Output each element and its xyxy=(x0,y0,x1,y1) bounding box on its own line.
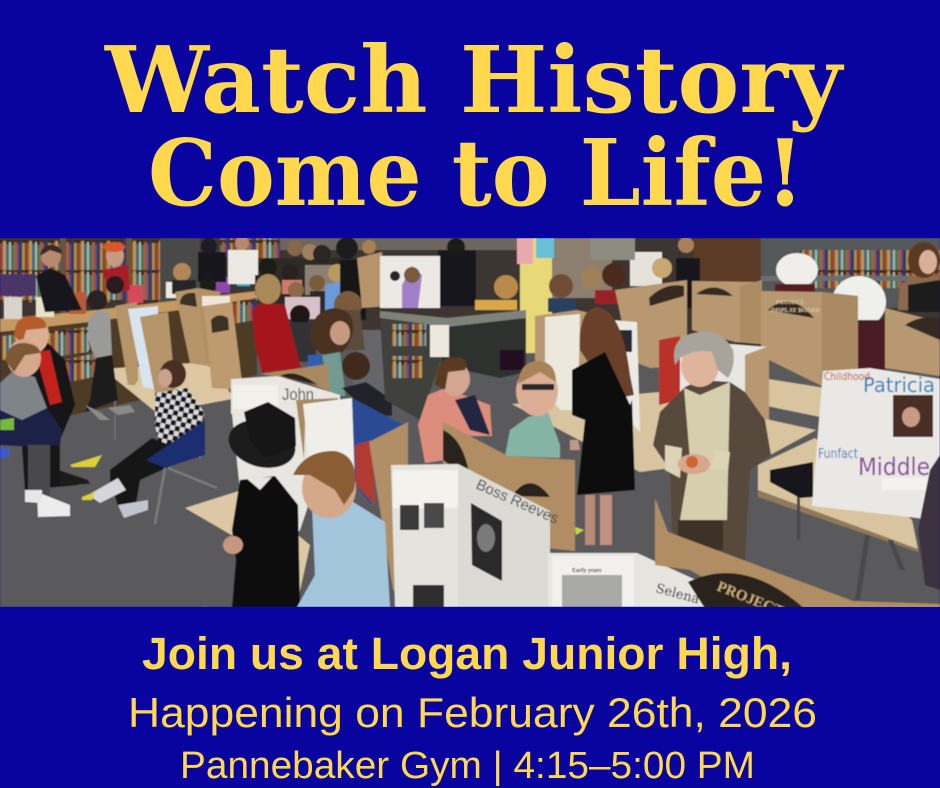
white board with Boss Reeves portrait: Boss Reeves xyxy=(473,476,561,528)
left bookcase xyxy=(0,271,257,416)
project display boards at the back: DISPLAY BOARD xyxy=(771,308,820,314)
tan board with Project Display Board logo xyxy=(443,422,575,551)
large project display board in the foreground: PROJECT xyxy=(715,579,785,620)
tables on the right xyxy=(512,378,918,600)
Selena board xyxy=(548,552,705,607)
back row of students xyxy=(548,237,700,312)
large project display board in the foreground xyxy=(654,498,940,607)
student in pinstripe jacket xyxy=(342,352,392,416)
title: Come to Life! xyxy=(148,119,804,227)
student in top hat and black suit xyxy=(223,402,301,607)
table behind the boards xyxy=(103,362,232,413)
carpet xyxy=(70,349,940,459)
Patricia trifold board xyxy=(812,368,940,525)
red hoodie student xyxy=(252,274,303,373)
girl seated in checked shirt xyxy=(88,360,217,524)
black bookcase center xyxy=(380,310,526,420)
boy in glasses and mint shirt xyxy=(505,361,560,458)
event details xyxy=(128,628,817,787)
venue and time line: Pannebaker Gym | 4:15–5:00 PM xyxy=(180,745,755,787)
project display boards at the back: PROJECT xyxy=(776,300,804,306)
photo: students at a living history fair in a library xyxy=(0,236,940,620)
gray hoodie student xyxy=(85,290,135,420)
Patricia trifold board: Middle xyxy=(858,453,930,481)
library back wall and shelves xyxy=(0,238,940,353)
Selena board: Selena xyxy=(654,581,701,607)
white board with Boss Reeves portrait xyxy=(391,464,561,607)
two boys talking at left xyxy=(0,316,90,517)
adults at the back left xyxy=(36,236,258,312)
wig students at back right xyxy=(775,242,940,372)
globe and back corner xyxy=(475,238,554,310)
date line: Happening on February 26th, 2026 xyxy=(128,689,817,736)
Selena board: Early years xyxy=(572,568,602,574)
board with handwriting behind center xyxy=(535,310,769,432)
student in black dress with long hair xyxy=(570,307,635,545)
boards and table center-left xyxy=(185,364,408,610)
lower carpet xyxy=(0,376,940,607)
Patricia trifold board: Childhood xyxy=(824,370,870,383)
title xyxy=(104,26,845,227)
crowd of students in the middle xyxy=(255,237,476,362)
Patricia trifold board: Funfact xyxy=(818,447,858,462)
Patricia trifold board: Patricia xyxy=(863,373,935,397)
boards and table center-left: John xyxy=(282,385,314,404)
teacher with curly hair xyxy=(308,308,353,396)
board with photo at back center xyxy=(357,252,440,308)
display boards on left table xyxy=(115,288,243,404)
title: Watch History xyxy=(104,26,845,134)
floor markers xyxy=(0,418,584,535)
boy in gray wig and brown robe xyxy=(653,332,771,563)
person at right edge in purple xyxy=(918,455,940,590)
project display boards at the back xyxy=(615,280,940,390)
student in light blue hoodie xyxy=(293,451,390,607)
girl in pink coat xyxy=(418,357,492,463)
location line: Join us at Logan Junior High, xyxy=(142,628,792,679)
